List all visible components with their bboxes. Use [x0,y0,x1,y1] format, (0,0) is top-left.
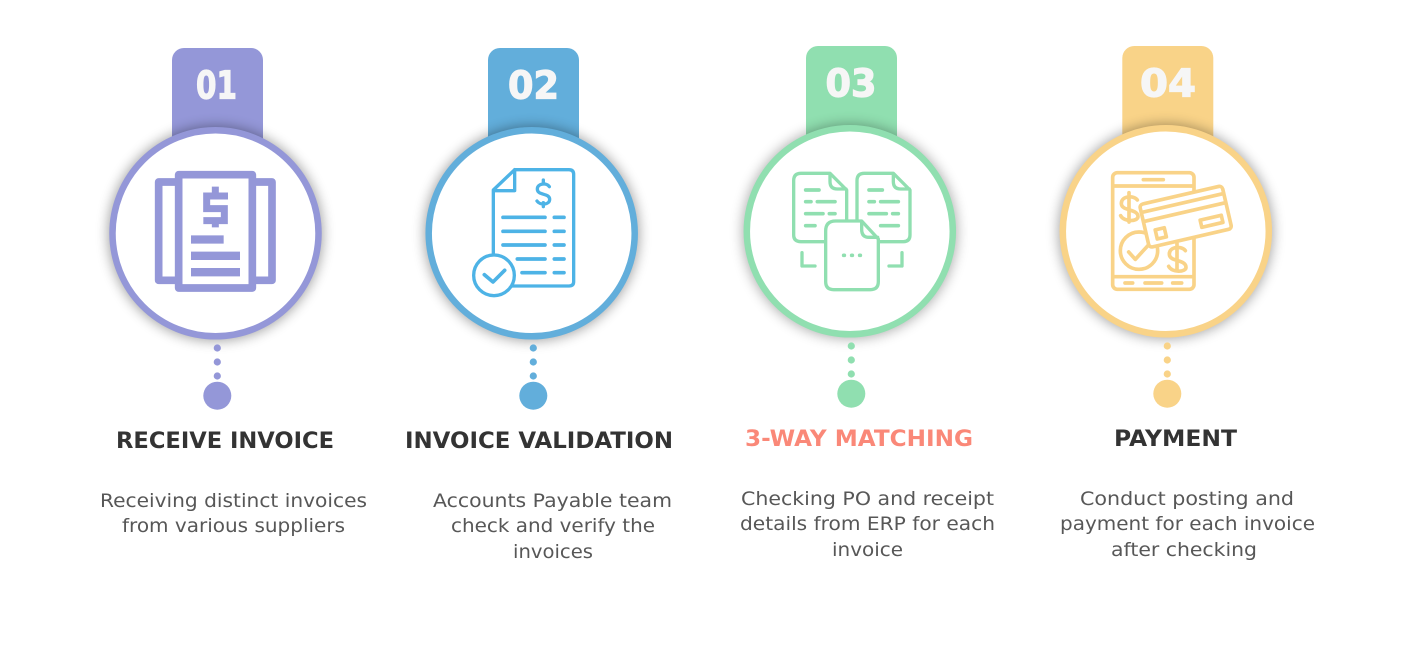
description 1: from various suppliers [122,515,345,537]
icon: invoice with dollar sign [159,175,272,288]
description 3: Checking PO and receipt [741,488,994,510]
description 4: Conduct posting and [1080,488,1294,510]
number tab 03: 03 [826,62,876,106]
description 2: invoices [513,541,593,563]
number tab 04: 04 [1140,62,1196,106]
step 3: 3-way matching [740,46,995,561]
circle badge 2 [429,130,635,336]
step 1: receive invoice [100,48,367,537]
number tab 01: 01 [196,64,237,108]
connector dots 4 [1153,342,1181,408]
description 1: Receiving distinct invoices [100,490,367,512]
number tab 02: 02 [508,64,559,108]
heading: receive invoice: RECEIVE INVOICE [116,429,334,454]
circle badge 3 [747,128,953,334]
connector dots 2 [519,344,547,410]
icon: document with check mark [474,170,574,296]
description 3: details from ERP for each [740,513,995,535]
description 1 [100,490,367,537]
description 2: check and verify the [451,515,655,537]
description 4: after checking [1111,539,1257,561]
description 3 [740,488,995,561]
number tab 03 [806,46,897,148]
description 3: invoice [832,539,903,561]
connector dots 1 [203,344,231,410]
number tab 01 [172,48,263,150]
heading: invoice validation: INVOICE VALIDATION [405,429,673,454]
step 2: invoice validation [405,48,673,563]
number tab 02 [488,48,579,150]
description 4: payment for each invoice [1060,513,1315,535]
description 4 [1060,488,1315,561]
connector dots 3 [837,342,865,408]
step 4: payment [1059,46,1315,561]
heading: 3-way matching: 3-WAY MATCHING [745,427,973,452]
circle badge 4 [1063,128,1269,334]
number tab 04 [1122,46,1213,148]
heading: payment: PAYMENT [1114,427,1237,452]
icon: phone and credit card [1113,173,1232,289]
description 2: Accounts Payable team [433,490,672,512]
description 2 [433,490,672,563]
circle badge 1 [112,130,318,336]
icon: three documents [794,173,910,290]
